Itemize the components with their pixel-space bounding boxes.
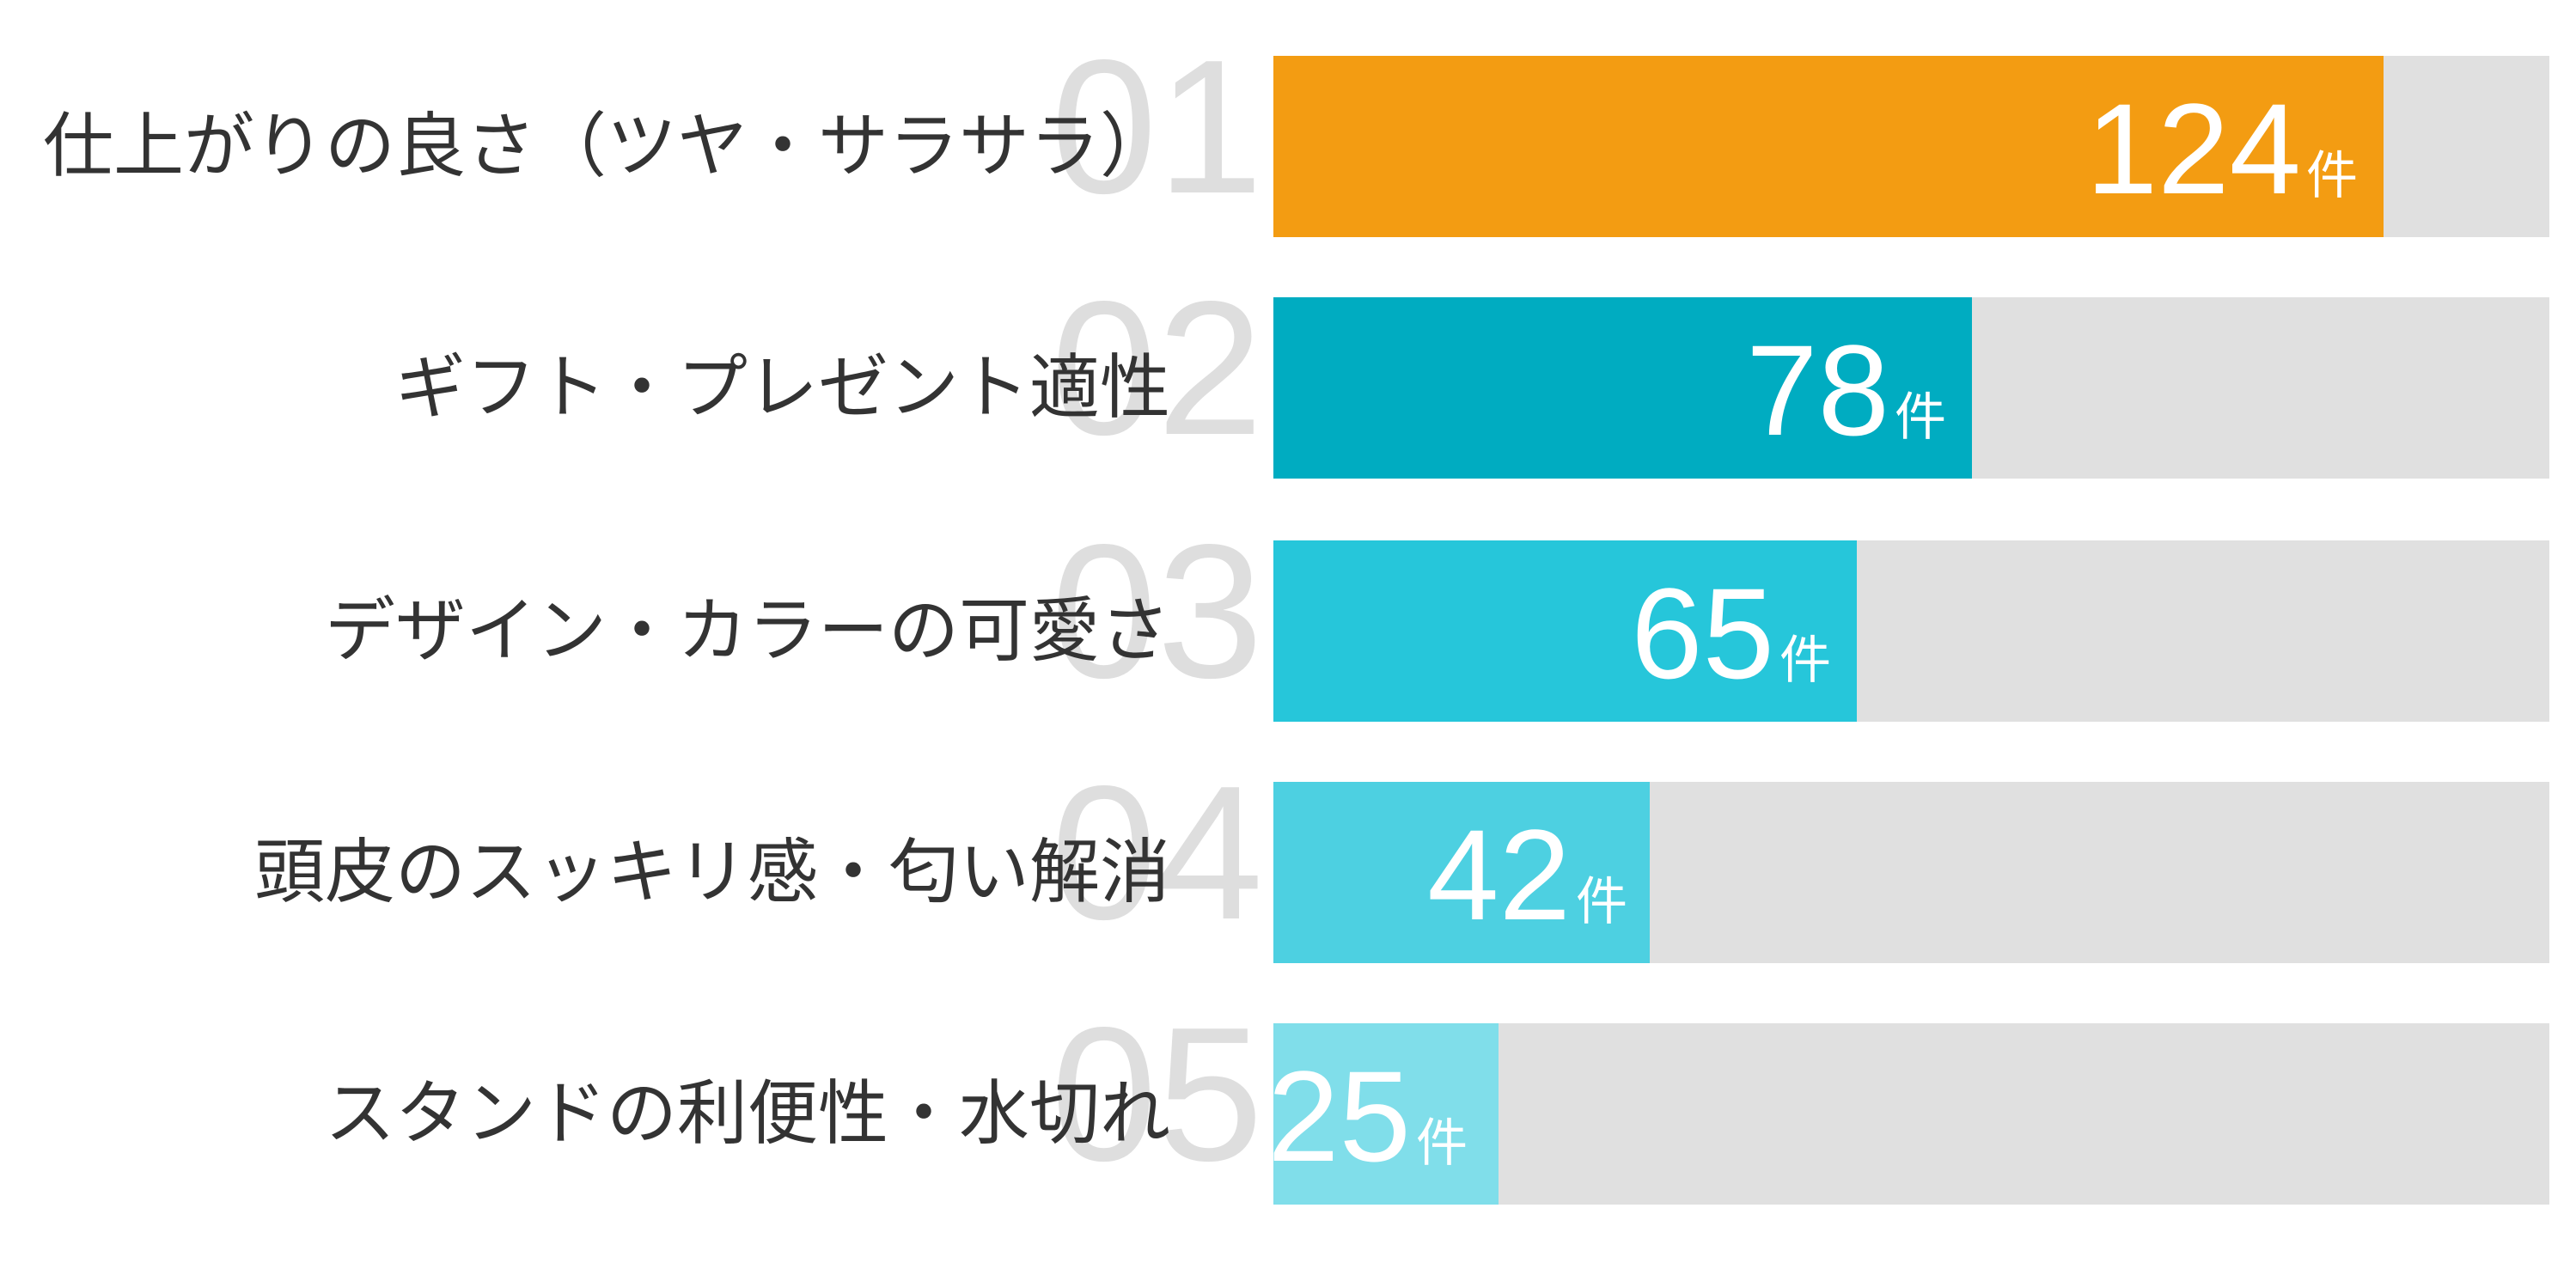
track 2 [1273, 297, 2549, 479]
bar 5: 25件 [1267, 1044, 1468, 1188]
track 4 [1273, 782, 2549, 963]
row 4 [254, 747, 2549, 963]
bar 3 [1273, 540, 1857, 722]
rank number 02: 02 [1051, 262, 1263, 475]
label 5: スタンドの利便性・水切れ [325, 1075, 1170, 1153]
label 4: 頭皮のスッキリ感・匂い解消 [254, 833, 1170, 912]
row 1 [43, 21, 2549, 237]
bar 5 [1273, 1023, 1499, 1205]
rank number 04: 04 [1051, 747, 1263, 960]
bar 2: 78件 [1746, 318, 1946, 462]
bar 3: 65件 [1631, 561, 1831, 705]
track 1 [1273, 56, 2549, 237]
label 1: 仕上がりの良さ（ツヤ・サラサラ） [43, 107, 1170, 186]
bar 2 [1273, 297, 1972, 479]
bar 4 [1273, 782, 1650, 963]
track 5 [1273, 1023, 2549, 1205]
track 3 [1273, 540, 2549, 722]
row 3 [325, 505, 2549, 722]
label 2: ギフト・プレゼント適性 [395, 349, 1170, 427]
bar 1: 124件 [2086, 76, 2358, 221]
rank number 01: 01 [1051, 21, 1263, 234]
bar 1 [1273, 56, 2384, 237]
row 2 [395, 262, 2549, 479]
row 5 [325, 988, 2549, 1205]
rank number 05: 05 [1051, 988, 1263, 1201]
label 3: デザイン・カラーの可愛さ [325, 592, 1170, 670]
bar 4: 42件 [1427, 802, 1627, 947]
rank number 03: 03 [1051, 505, 1263, 718]
